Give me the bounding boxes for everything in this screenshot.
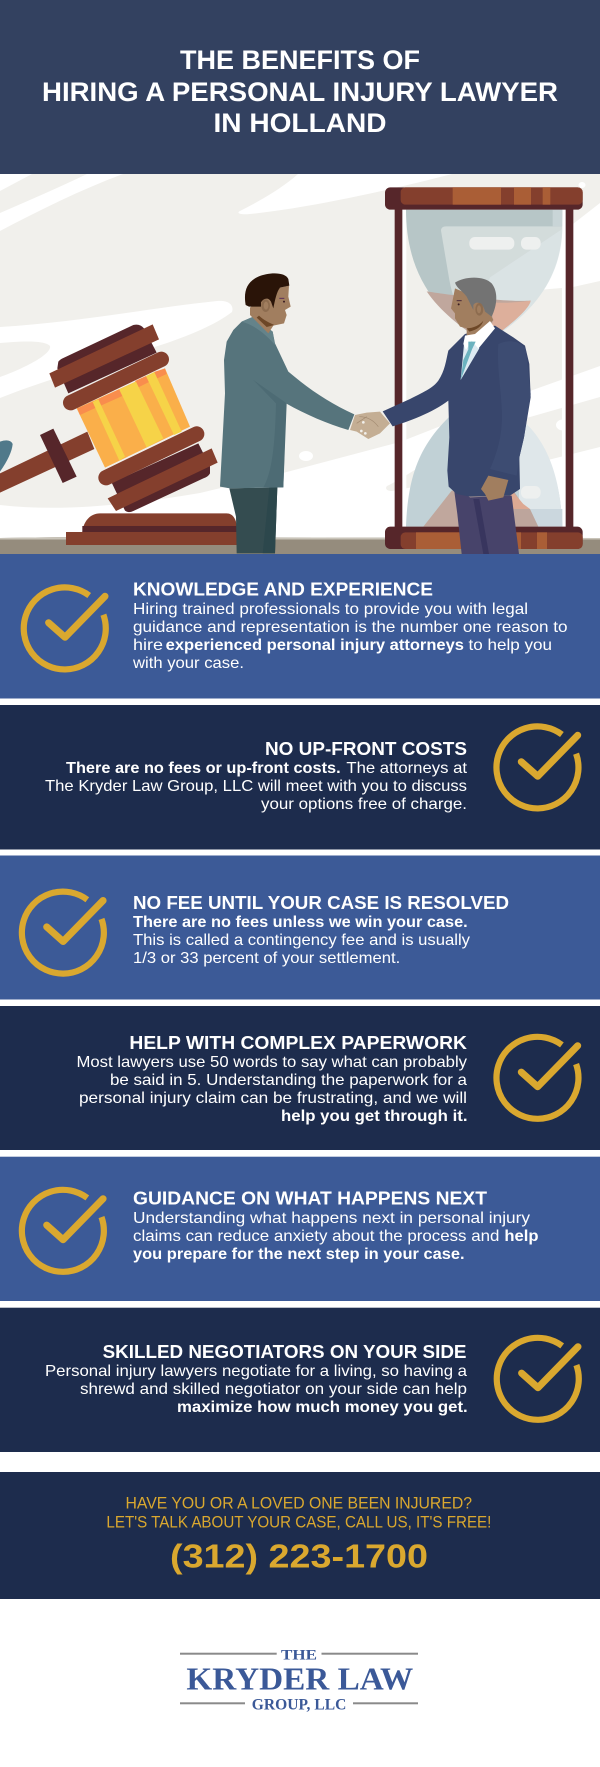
icon: handshake (350, 412, 390, 439)
icon: gold check circle (24, 587, 106, 669)
icon: gold check circle (22, 892, 104, 974)
title (42, 45, 558, 138)
panel: no fee until case is resolved (0, 856, 600, 1000)
text block: Most lawyers use 50 words to say what can probably (76, 1054, 467, 1071)
panel: no up-front costs (0, 705, 600, 850)
icon: gold check circle (496, 726, 578, 808)
logo: The Kryder Law Group, LLC (180, 1647, 418, 1713)
text block (76, 1054, 468, 1125)
text block: personal injury claim can be frustrating, and we will (79, 1090, 467, 1107)
text block: help (504, 1228, 538, 1245)
heading: SKILLED NEGOTIATORS ON YOUR SIDE (103, 1341, 466, 1362)
heading: GUIDANCE ON WHAT HAPPENS NEXT (133, 1188, 488, 1209)
icon: gavel (0, 324, 237, 545)
text block: claims can reduce anxiety about the process and (133, 1228, 499, 1245)
text block: The attorneys at (346, 760, 468, 777)
logo: The Kryder Law Group, LLC: THE (281, 1647, 317, 1663)
title: IN HOLLAND (214, 108, 386, 138)
text block: Personal injury lawyers negotiate for a living, so having a (45, 1363, 467, 1380)
text block (45, 1363, 468, 1416)
text block: be said in 5. Understanding the paperwork for a (110, 1072, 467, 1089)
heading: HELP WITH COMPLEX PAPERWORK (129, 1032, 468, 1053)
text block: Understanding what happens next in personal injury (133, 1210, 530, 1227)
text block: your options free of charge. (261, 796, 467, 813)
text block: Hiring trained professionals to provide you with legal (133, 601, 528, 618)
text block: call to action (106, 1494, 491, 1532)
text block: maximize how much money you get. (177, 1399, 468, 1416)
panel: skilled negotiators on your side (0, 1308, 600, 1452)
text block: you prepare for the next step in your case. (133, 1246, 465, 1263)
illustration: handshake with gavel and hourglass (0, 174, 600, 554)
text block: This is called a contingency fee and is usually (133, 932, 470, 949)
panel: call to action (0, 1472, 600, 1599)
text block: to help you (468, 637, 552, 654)
text block: call to action: LET'S TALK ABOUT YOUR CASE, CALL US, IT'S FREE! (106, 1514, 491, 1532)
text block (132, 601, 568, 672)
text block (133, 1210, 538, 1263)
icon: hourglass (385, 187, 583, 549)
text block: experienced personal injury attorneys (166, 637, 464, 654)
text block: There are no fees or up-front costs. (66, 760, 341, 777)
text block (133, 914, 470, 967)
heading: NO UP-FRONT COSTS (265, 738, 467, 759)
text block: with your case. (132, 655, 244, 672)
figure: man in teal jacket (220, 273, 354, 553)
figure: man in navy suit (383, 278, 531, 554)
text block: shrewd and skilled negotiator on your side can help (80, 1381, 467, 1398)
icon: gold check circle (496, 1037, 578, 1119)
title: THE BENEFITS OF (180, 45, 420, 75)
text block: hire (133, 637, 163, 654)
title banner (0, 0, 600, 174)
logo: The Kryder Law Group, LLC: GROUP, LLC (252, 1696, 346, 1713)
text block: guidance and representation is the number one reason to (133, 619, 568, 636)
text block: There are no fees unless we win your case. (133, 914, 468, 931)
icon: gold check circle (497, 1338, 579, 1420)
text block: The Kryder Law Group, LLC will meet with you to discuss (45, 778, 467, 795)
text block: help you get through it. (281, 1108, 468, 1125)
text block: call to action: HAVE YOU OR A LOVED ONE BEEN INJURED? (126, 1494, 472, 1512)
panel: knowledge and experience (0, 554, 600, 698)
title: HIRING A PERSONAL INJURY LAWYER (42, 77, 558, 107)
heading: KNOWLEDGE AND EXPERIENCE (133, 579, 433, 600)
icon: gold check circle (22, 1190, 104, 1272)
panel: help with complex paperwork (0, 1006, 600, 1150)
logo: The Kryder Law Group, LLC: KRYDER LAW (186, 1660, 413, 1696)
text block: 1/3 or 33 percent of your settlement. (133, 950, 400, 967)
text block (45, 760, 468, 813)
ground (0, 537, 600, 554)
heading: NO FEE UNTIL YOUR CASE IS RESOLVED (133, 892, 509, 913)
phone number: (312) 223-1700 (170, 1537, 428, 1574)
panel: guidance on what happens next (0, 1157, 600, 1301)
